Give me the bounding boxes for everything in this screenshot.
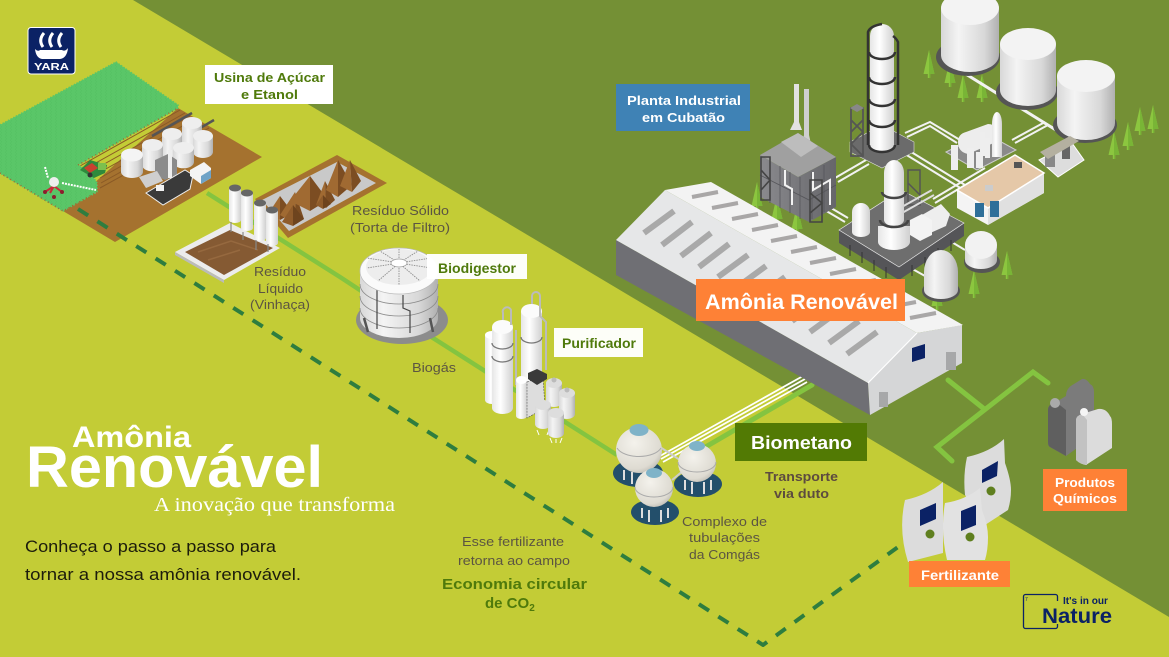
column [492,327,513,414]
It's in our Nature logo: 7 [1025,597,1028,603]
pipe rack [900,190,934,213]
white ducting [785,170,830,205]
scaffold [851,108,863,156]
pump shed [1039,136,1084,177]
gable wall [868,325,962,415]
label: Amônia Renovável: Amônia Renovável [705,291,898,314]
platform [850,125,914,168]
rear bag [964,439,1011,525]
text: liquid residue: (Vinhaça) [250,297,310,312]
text: fertilizer return [458,534,570,568]
trees [752,50,1158,310]
label: Biometano: Biometano [751,433,852,453]
equipment cluster [946,112,1016,170]
text: pipeline transport: via duto [774,486,829,501]
far roof slope [665,182,963,333]
lower tank A [964,231,1000,273]
label: Biodigestor: Biodigestor [438,261,517,276]
purifier columns and silos [485,292,575,443]
big storage tank 3 [1053,60,1117,143]
label: Produtos Químicos: Químicos [1053,491,1117,506]
harvester [80,160,107,178]
sphere 2 [674,441,722,497]
big storage tank 1 [936,0,1000,76]
text: solid residue [350,203,450,235]
text: circular economy: 2 [529,603,535,614]
small silo [546,383,562,407]
warehouse logo [912,344,925,362]
It's in our Nature logo [1024,594,1112,628]
intro text: tornar a nossa amônia renovável. [25,566,301,584]
tower rings [868,24,898,152]
gas sphere complex [613,424,722,525]
solid residue bed with filter cake piles [255,155,387,238]
distillation tower with scaffold [850,24,914,168]
silo [173,148,194,168]
text: solid residue: Resíduo Sólido [352,203,449,218]
sphere 3 [631,468,679,525]
text: Comgás complex: Complexo de [682,514,767,529]
white jug [1076,409,1112,465]
heat exchanger [516,380,527,419]
YARA logo: YARA [34,62,69,73]
piles [268,160,361,226]
label: Fertilizante [909,561,1010,587]
plant connecting pipes [823,63,1064,276]
control box [528,369,547,385]
side vessel [852,203,870,237]
frames [761,157,822,222]
mill shed [139,171,163,188]
small vessels [951,132,990,170]
office building [957,155,1044,225]
column [521,311,542,395]
title line: Renovável: Renovável [26,435,323,500]
horizontal vessel [922,204,950,234]
field edge stems [0,108,178,211]
label: Planta Industrial em Cubatão: Planta Industrial [627,93,741,108]
body [760,155,836,222]
silo [142,145,163,171]
brown ground [63,108,262,242]
It's in our Nature logo: It's in our [1063,595,1108,607]
front bag [943,488,988,560]
green cane [0,62,178,211]
reactor platform [839,160,964,280]
storage tank [121,155,143,178]
label: Produtos Químicos: Produtos [1055,475,1115,490]
sphere 1 [613,424,663,487]
label: Fertilizante: Fertilizante [921,567,999,583]
warehouse [616,182,963,415]
main reactor [878,226,910,250]
small silo [535,405,551,429]
text: circular economy: de CO [485,595,529,612]
sugar cane field and ethanol plant [0,62,262,242]
dashed CO2 return route [78,209,898,645]
fertilizer bags [902,439,1011,562]
silo [162,134,182,164]
white biomethane ducts [660,376,807,462]
text: circular economy: Economia circular [442,576,587,593]
label: Purificador: Purificador [562,336,637,351]
conveyor belts [152,113,214,138]
title block [26,421,395,516]
It's in our Nature logo: Nature [1042,605,1112,628]
label: Usina de Açúcar e Etanol: Usina de Açúcar [214,70,325,85]
text: Comgás complex [682,514,767,562]
column [254,203,266,241]
liquid residue pond with columns [175,184,280,283]
lower tank B [922,250,960,302]
silo [193,136,213,158]
left bag [902,482,943,562]
product distribution pipeline [937,372,1048,461]
column [241,193,253,231]
rear column [485,335,499,404]
processing unit [155,154,177,180]
biomethane pipeline [690,385,812,456]
small silo [548,413,564,438]
tall vessel [992,112,1002,157]
title line: Amônia: Amônia [72,421,191,454]
label: Biodigestor [427,254,527,279]
intro text: Conheça o passo a passo para [25,538,277,556]
stacks [790,84,802,130]
compressor box [910,214,932,241]
soil furrows [80,110,209,188]
text: pipeline transport: Transporte [765,469,838,484]
wall doors [879,392,888,407]
small silo [559,393,575,419]
label: Amônia Renovável [696,279,905,321]
label: Usina de Açúcar e Etanol [205,65,333,104]
subtitle: A inovação que transforma [154,494,395,516]
far skylights [692,192,936,318]
dark jerrycan [1048,379,1094,456]
boiler building [760,84,836,222]
biodigestor tank [356,248,448,344]
biogas pipeline [207,193,617,455]
text: Comgás complex: da Comgás [689,547,761,562]
near skylights [644,211,877,354]
column [266,210,278,246]
text: solid residue: (Torta de Filtro) [350,220,450,235]
label: Planta Industrial em Cubatão: em Cubatão [642,110,725,125]
intro text [25,538,301,584]
label: Planta Industrial em Cubatão [616,84,750,131]
label: Produtos Químicos [1043,469,1127,511]
horizontal vessel [958,124,996,154]
office [190,162,211,184]
YARA logo [28,28,75,74]
left wall [616,240,870,415]
chemical jerrycans [1048,379,1112,465]
text: fertilizer return: retorna ao campo [458,553,570,568]
text: biogas: Biogás [412,360,457,375]
roof spokes [367,249,431,285]
connecting pipes [660,447,690,480]
column [229,188,241,223]
column [870,24,894,152]
silo [182,123,202,152]
label: Purificador [554,328,643,357]
text: liquid residue: Líquido [258,281,303,296]
irrigation pivot [43,167,96,199]
label: Biometano [735,423,867,461]
text: fertilizer return: Esse fertilizante [462,534,564,549]
small scaffold [908,170,920,205]
text: liquid residue [250,264,310,312]
label: Usina de Açúcar e Etanol: e Etanol [241,87,298,102]
text: Comgás complex: tubulações [689,530,761,545]
text: pipeline transport [765,469,838,501]
text: liquid residue: Resíduo [254,264,306,279]
truck [156,185,164,191]
big storage tank 2 [996,28,1058,110]
yard road [146,170,193,205]
near roof slope [616,190,917,383]
text: circular economy [442,576,587,614]
